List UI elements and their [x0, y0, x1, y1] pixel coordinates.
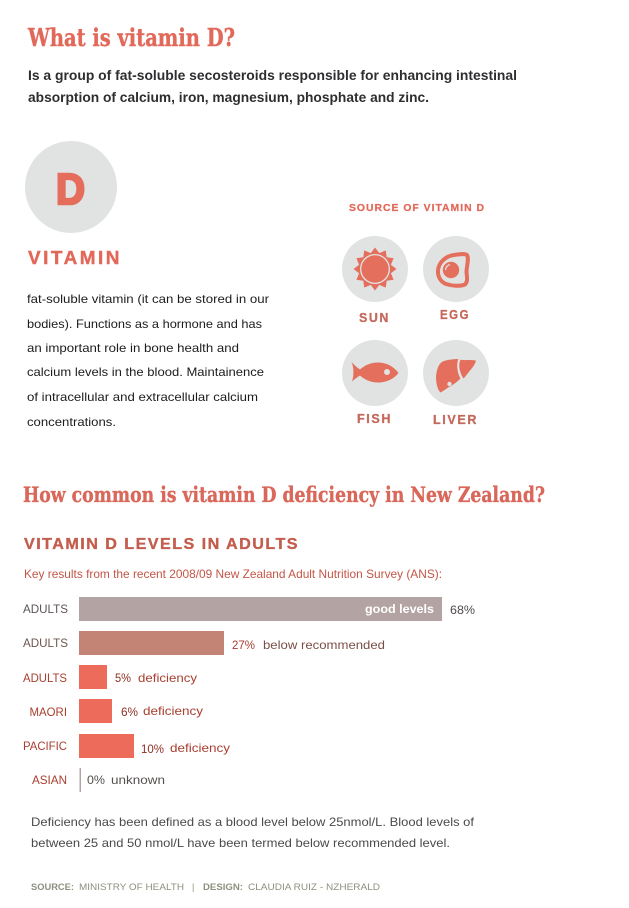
- bar: adults below recommended: 27%: [232, 638, 255, 652]
- bar: adults deficiency: [23, 665, 197, 689]
- chart heading: VITAMIN D LEVELS IN ADULTS: [24, 536, 299, 553]
- bar: adults good levels: ADULTS: [23, 602, 68, 616]
- bar: adults good levels: [23, 597, 475, 621]
- bar: adults below recommended: below recommended: [263, 638, 385, 652]
- bar: adults good levels: 68%: [450, 603, 475, 617]
- title: What is vitamin D?: [27, 23, 235, 52]
- source credit: [31, 882, 381, 892]
- icon: vitamin D badge: [25, 141, 117, 233]
- bar: adults below recommended: [23, 631, 385, 655]
- vitamin description: [27, 292, 269, 429]
- intro text: Is a group of fat-soluble secosteroids responsible for enhancing intestinal: [28, 68, 517, 83]
- icon: vitamin D badge: D: [56, 165, 85, 214]
- vitamin heading: VITAMIN: [28, 248, 122, 268]
- bar: maori deficiency: [30, 699, 203, 723]
- vitamin description: fat-soluble vitamin (it can be stored in our: [27, 292, 269, 306]
- footnote text: between 25 and 50 nmol/L have been termed below recommended level.: [31, 836, 450, 850]
- bar: adults below recommended: ADULTS: [23, 636, 68, 650]
- vitamin description: an important role in bone health and: [27, 341, 239, 355]
- bar: maori deficiency: deficiency: [143, 704, 203, 718]
- source credit: CLAUDIA RUIZ - NZHERALD: [248, 882, 381, 892]
- intro text: [28, 68, 517, 105]
- bar: maori deficiency: MAORI: [30, 705, 67, 719]
- footnote text: [31, 815, 475, 850]
- vitamin description: concentrations.: [27, 415, 116, 429]
- vitamin description: bodies). Functions as a hormone and has: [27, 317, 262, 331]
- vitamin description: of intracellular and extracellular calcium: [27, 390, 258, 404]
- chart subtitle: Key results from the recent 2008/09 New Zealand Adult Nutrition Survey (ANS):: [24, 567, 442, 581]
- icon: egg: [423, 236, 489, 302]
- intro text: absorption of calcium, iron, magnesium, phosphate and zinc.: [28, 90, 429, 105]
- bar: pacific deficiency: 10%: [141, 742, 164, 756]
- sun label: SUN: [359, 311, 390, 325]
- source credit: |: [192, 882, 194, 892]
- bar: pacific deficiency: [23, 734, 230, 758]
- footnote text: Deficiency has been defined as a blood level below 25nmol/L. Blood levels of: [31, 815, 475, 829]
- source heading: SOURCE OF VITAMIN D: [349, 202, 485, 214]
- fish label: FISH: [357, 412, 392, 426]
- icon: liver: [423, 340, 489, 406]
- bar: asian unknown: [32, 768, 165, 792]
- bar: maori deficiency: 6%: [121, 705, 138, 719]
- icon: fish: [342, 340, 408, 406]
- bar: pacific deficiency: PACIFIC: [23, 739, 67, 753]
- bar: adults deficiency: ADULTS: [23, 671, 67, 685]
- bar: pacific deficiency: deficiency: [170, 741, 230, 755]
- bar: adults good levels: good levels: [365, 602, 434, 616]
- bar: adults deficiency: 5%: [115, 671, 131, 685]
- source credit: DESIGN:: [203, 882, 243, 892]
- liver label: LIVER: [433, 413, 478, 427]
- bar: asian unknown: ASIAN: [32, 773, 67, 787]
- bar: adults deficiency: deficiency: [138, 671, 197, 685]
- egg label: EGG: [440, 308, 470, 322]
- source credit: MINISTRY OF HEALTH: [79, 882, 184, 892]
- bar chart: [23, 597, 475, 792]
- panel: sources of vitamin D: [342, 202, 489, 427]
- bar: asian unknown: 0%: [87, 773, 105, 787]
- icon: sun: [342, 236, 408, 302]
- bar: asian unknown: unknown: [111, 773, 165, 787]
- source credit: SOURCE:: [31, 882, 74, 892]
- vitamin description: calcium levels in the blood. Maintainence: [27, 365, 264, 379]
